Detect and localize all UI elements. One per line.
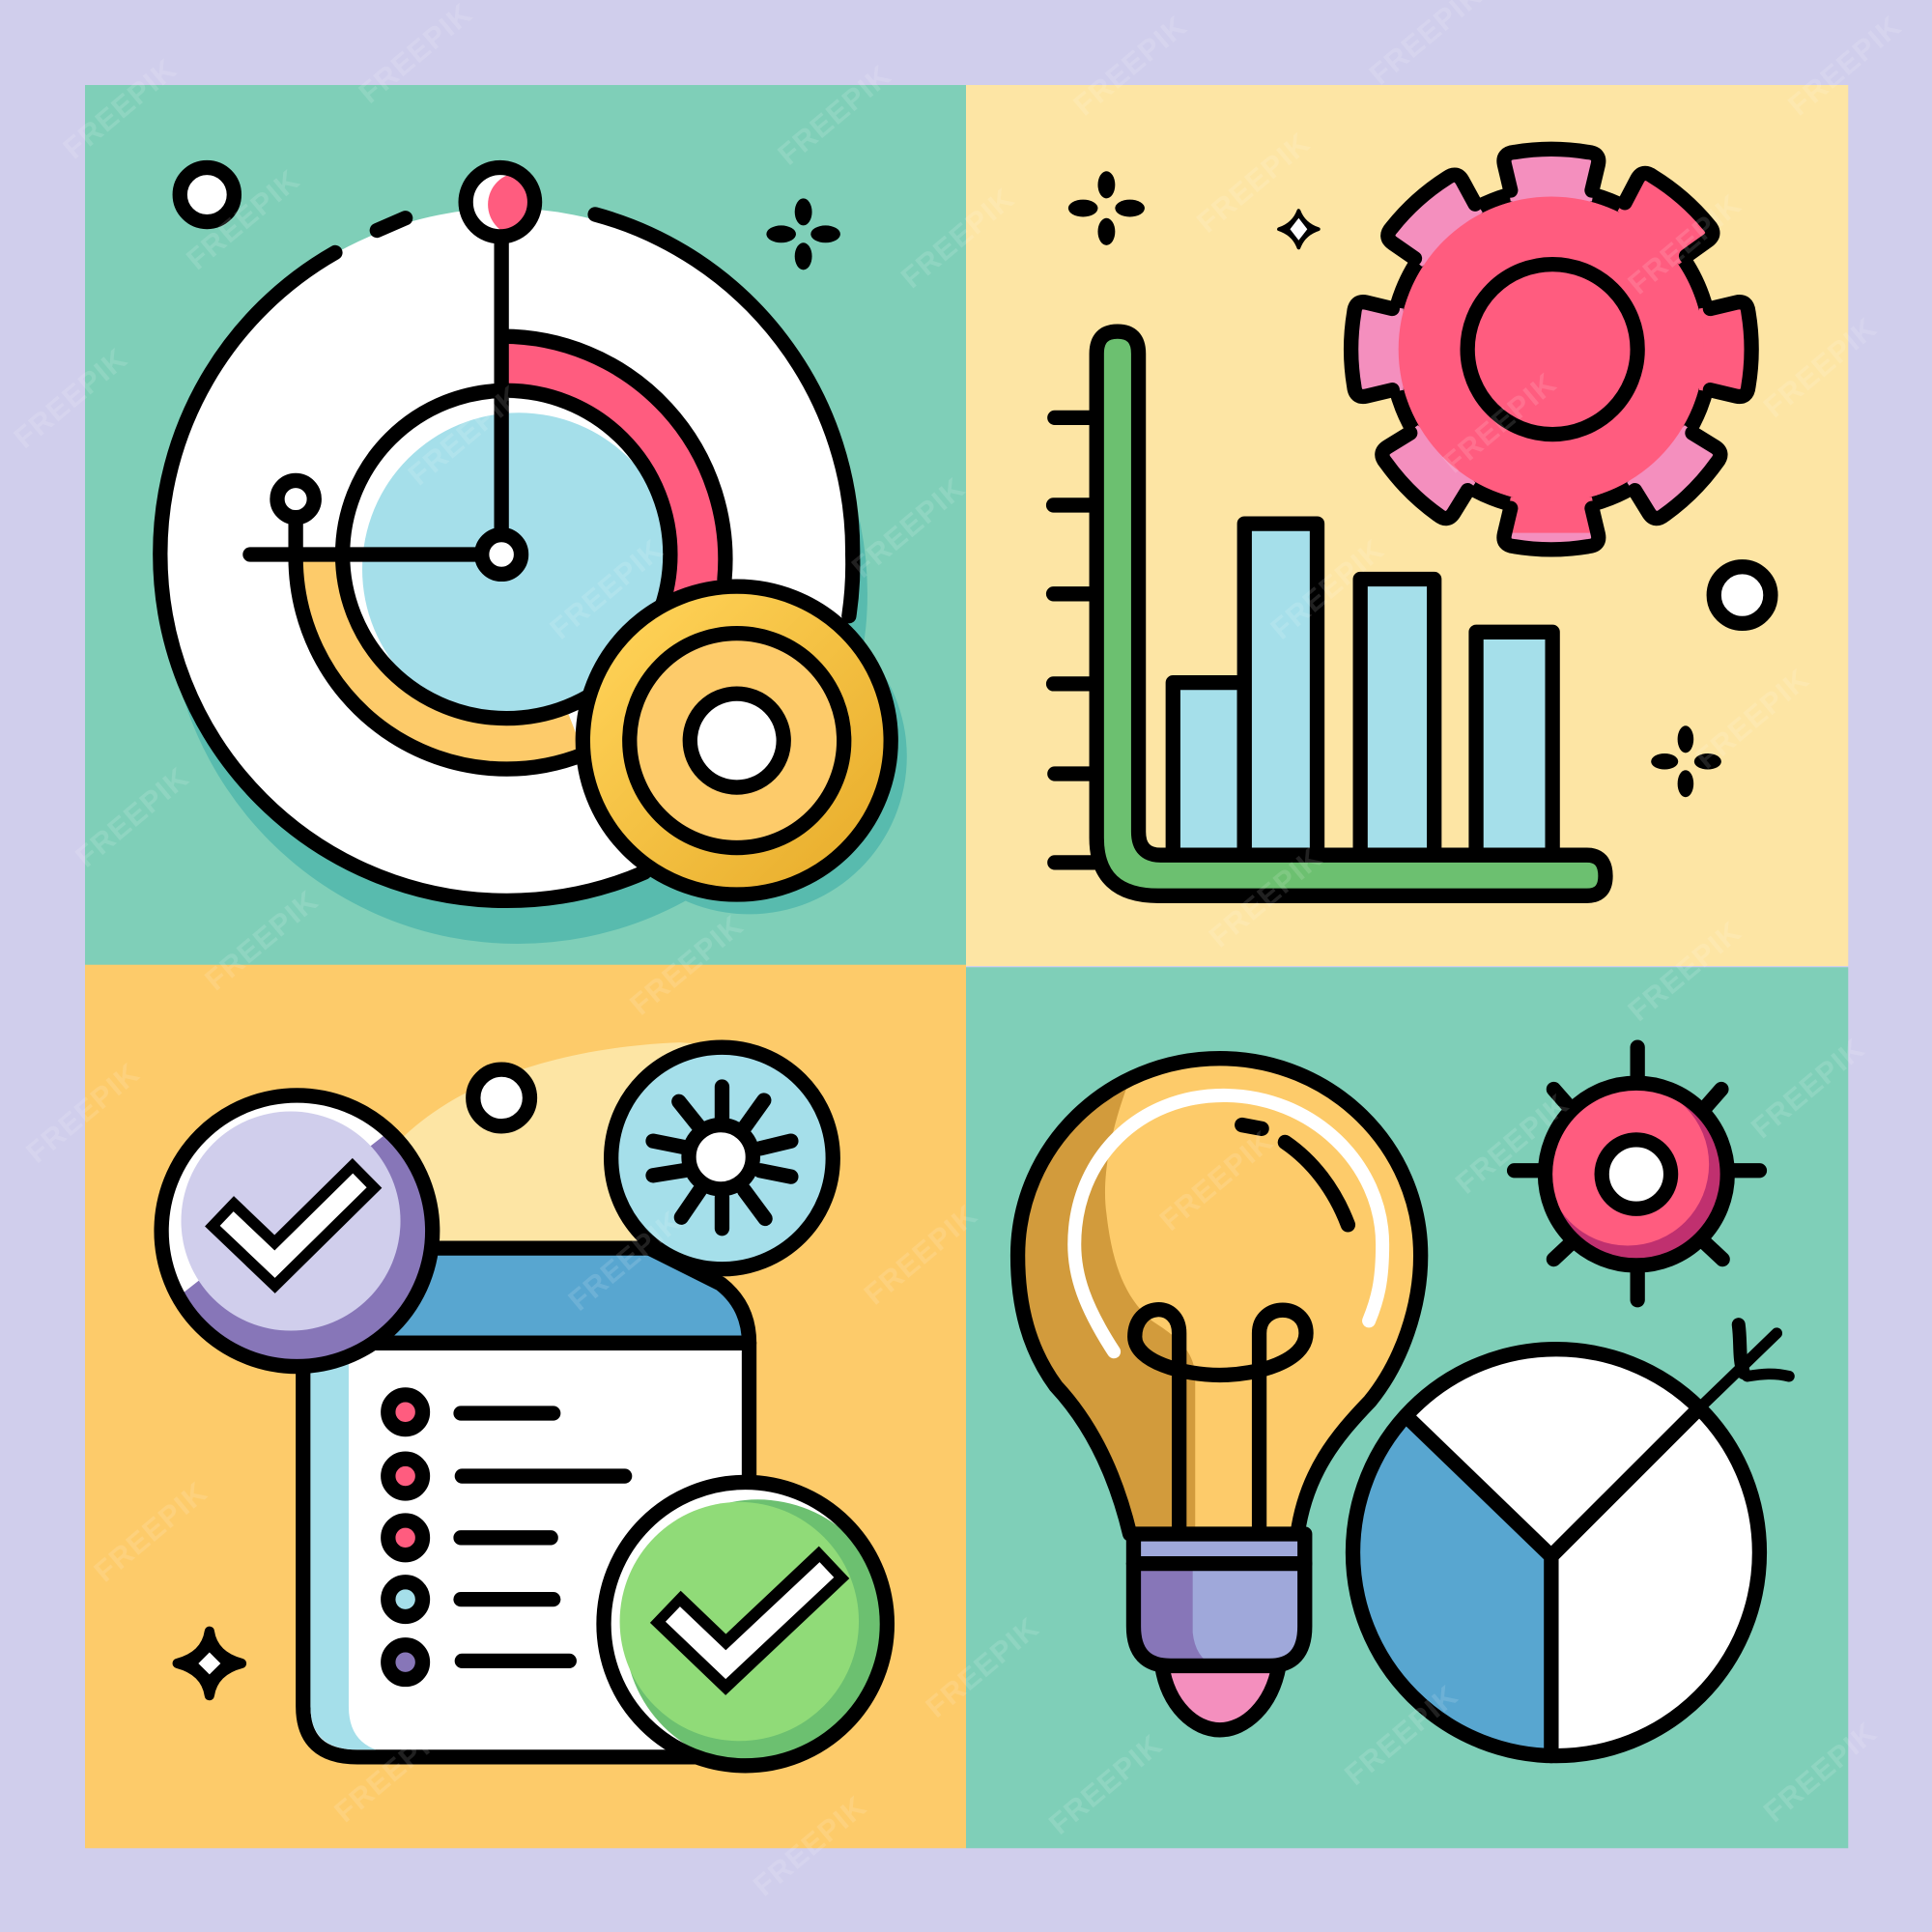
- watermark: FREEPIK: [772, 58, 897, 172]
- green check badge: [604, 1482, 891, 1766]
- watermark: FREEPIK: [181, 163, 306, 276]
- document: [303, 1248, 750, 1757]
- watermark: FREEPIK: [1437, 366, 1563, 479]
- document body: [303, 1343, 750, 1757]
- watermark: FREEPIK: [328, 1716, 454, 1829]
- watermark: FREEPIK: [70, 761, 195, 874]
- watermark: FREEPIK: [1264, 533, 1390, 646]
- light bulb: [1018, 1047, 1441, 1730]
- sun rays: [653, 1087, 791, 1229]
- watermark: FREEPIK: [1757, 311, 1884, 424]
- gear teeth: [1351, 149, 1751, 550]
- watermark: FREEPIK: [1782, 9, 1908, 123]
- highlight: [1074, 1095, 1382, 1351]
- gear icon: [1351, 149, 1751, 550]
- panel background orange: [85, 965, 966, 1848]
- pin small: [277, 480, 314, 518]
- sun badge: [611, 1047, 833, 1269]
- watermark: FREEPIK: [1191, 127, 1317, 240]
- watermark: FREEPIK: [1153, 1124, 1280, 1237]
- reflection: [1242, 1125, 1348, 1225]
- yellow arc segment: [296, 554, 584, 769]
- watermark: FREEPIK: [1339, 1679, 1464, 1792]
- sparkle left: [1068, 171, 1145, 245]
- dial outline arcs: [160, 214, 853, 900]
- watermark: FREEPIK: [1622, 915, 1747, 1028]
- tip: [1162, 1665, 1279, 1730]
- watermark: FREEPIK: [624, 909, 750, 1022]
- glass: [1018, 1047, 1441, 1540]
- watermark: FREEPIK: [846, 471, 972, 584]
- pie dividers: [1407, 1407, 1700, 1756]
- small gear: [1515, 1047, 1759, 1300]
- sparkle right: [1651, 725, 1721, 797]
- drop shadow: [167, 244, 907, 944]
- watermark: FREEPIK: [920, 1611, 1045, 1724]
- watermark: FREEPIK: [1622, 187, 1747, 300]
- panel background teal: [966, 967, 1848, 1848]
- sparkle diamond: [1279, 211, 1319, 247]
- purple check badge: [154, 1088, 440, 1374]
- small circle: [1714, 567, 1771, 623]
- watermark: FREEPIK: [20, 1057, 146, 1170]
- small circle: [473, 1069, 529, 1126]
- filament: [1135, 1310, 1306, 1534]
- list lines: [461, 1413, 625, 1661]
- coin: [582, 586, 891, 895]
- document header: [303, 1248, 750, 1343]
- watermark: FREEPIK: [8, 342, 133, 455]
- watermark: FREEPIK: [544, 533, 669, 646]
- clock hands: [250, 234, 501, 554]
- pie blue slice: [1355, 1417, 1551, 1756]
- axis ticks: [1054, 417, 1094, 863]
- pie chart: [1353, 1324, 1789, 1756]
- small circle: [180, 167, 234, 222]
- watermark: FREEPIK: [858, 1198, 984, 1311]
- panel background cream: [966, 85, 1848, 966]
- bars: [1173, 524, 1552, 855]
- pink arc segment: [501, 336, 729, 604]
- sparkle: [766, 198, 840, 270]
- list bullets: [388, 1395, 423, 1680]
- watermark: FREEPIK: [562, 1205, 688, 1318]
- sparkle star: [178, 1632, 242, 1695]
- white dial disc: [160, 209, 853, 900]
- panel: checklist: [85, 965, 966, 1848]
- watermark: FREEPIK: [1450, 1088, 1576, 1201]
- watermark: FREEPIK: [895, 182, 1021, 295]
- panel: clock chart: [85, 85, 966, 966]
- yellow glow blob: [401, 1042, 739, 1251]
- arrow: [1698, 1324, 1789, 1409]
- watermark: FREEPIK: [199, 884, 325, 997]
- panel: light bulb and pie: [966, 967, 1848, 1848]
- pin top: [466, 167, 552, 237]
- watermark: FREEPIK: [1690, 662, 1816, 776]
- gear hole: [1467, 265, 1637, 435]
- watermark: FREEPIK: [747, 1790, 873, 1903]
- gear body: [1399, 196, 1704, 502]
- green axes: [1096, 331, 1605, 895]
- watermark: FREEPIK: [402, 379, 528, 492]
- watermark: FREEPIK: [1203, 840, 1329, 954]
- clock hub: [482, 535, 522, 574]
- panel: bar chart and gear: [966, 85, 1848, 966]
- watermark: FREEPIK: [1746, 1032, 1871, 1145]
- watermark: FREEPIK: [1757, 1716, 1884, 1829]
- watermark: FREEPIK: [88, 1475, 213, 1588]
- watermark: FREEPIK: [353, 0, 479, 110]
- watermark: FREEPIK: [57, 52, 183, 165]
- document side strip: [310, 1350, 376, 1749]
- watermark: FREEPIK: [1043, 1728, 1169, 1841]
- watermark: FREEPIK: [1067, 9, 1193, 123]
- spikes: [1515, 1047, 1759, 1300]
- inner blue circle: [343, 390, 675, 725]
- socket: [1133, 1534, 1305, 1665]
- panel background teal: [85, 85, 966, 966]
